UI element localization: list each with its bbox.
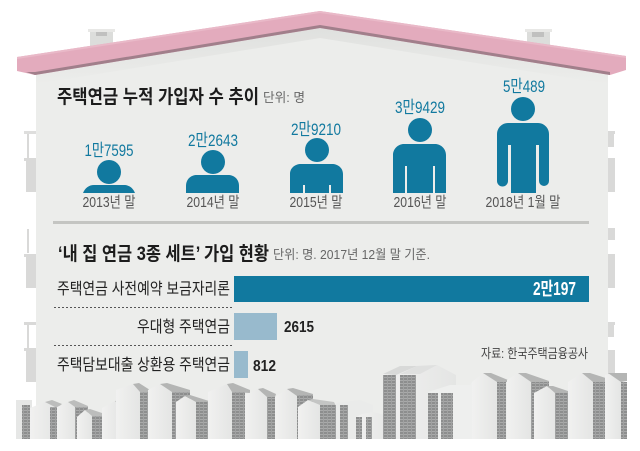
bar row: mortgage conversion: 812: [253, 358, 276, 375]
wall shadow under roof: [36, 27, 608, 84]
left cluster: [16, 383, 393, 439]
bar row: mortgage conversion: [57, 351, 276, 378]
bar row: advance reservation: 주택연금 사전예약 보금자리론: [57, 280, 230, 298]
person: 2015: 2만9210: [291, 120, 341, 139]
person: 2016: 2016년 말: [394, 194, 447, 211]
title: subscribers trend: 단위: 명: [263, 90, 305, 105]
bar row: advance reservation: 2만197: [533, 279, 576, 299]
person chart: [82, 77, 561, 211]
apartment skyline: [16, 365, 627, 439]
title: subscribers trend: 주택연금 누적 가입자 수 추이: [57, 86, 259, 108]
chimneys: [88, 29, 552, 48]
side balconies: [24, 131, 615, 382]
person: 2015: 2015년 말: [290, 194, 343, 211]
bar row: mortgage conversion: 주택담보대출 상환용 주택연금: [57, 356, 230, 374]
person: 2015: [290, 120, 343, 211]
bar row: preferential: 우대형 주택연금: [137, 318, 230, 336]
title: pension set status: 단위: 명. 2017년 12월 말 기준.: [273, 247, 430, 262]
bar row: preferential: 2615: [284, 319, 314, 336]
person: 2013: [82, 141, 136, 211]
bar row: advance reservation: [57, 276, 589, 302]
person: 2018: [486, 77, 561, 211]
person: 2018: 2018년 1월 말: [486, 194, 561, 211]
right cluster: [383, 365, 627, 439]
roof: [17, 11, 626, 75]
person: 2013: 1만7595: [84, 141, 134, 160]
person: 2014: 2014년 말: [186, 194, 240, 211]
title: pension set status: [58, 243, 430, 265]
person: 2014: 2만2643: [188, 131, 238, 150]
bar row: preferential: [137, 313, 314, 340]
source: 자료: 한국주택금융공사: [481, 346, 588, 361]
person: 2016: 3만9429: [395, 98, 445, 117]
bar chart: [54, 276, 589, 378]
person: 2016: [393, 98, 447, 211]
person: 2014: [186, 131, 240, 211]
person: 2013: 2013년 말: [82, 194, 136, 211]
title: pension set status: ‘내 집 연금 3종 세트’ 가입 현황: [58, 243, 269, 265]
person: 2018: 5만489: [503, 77, 545, 96]
